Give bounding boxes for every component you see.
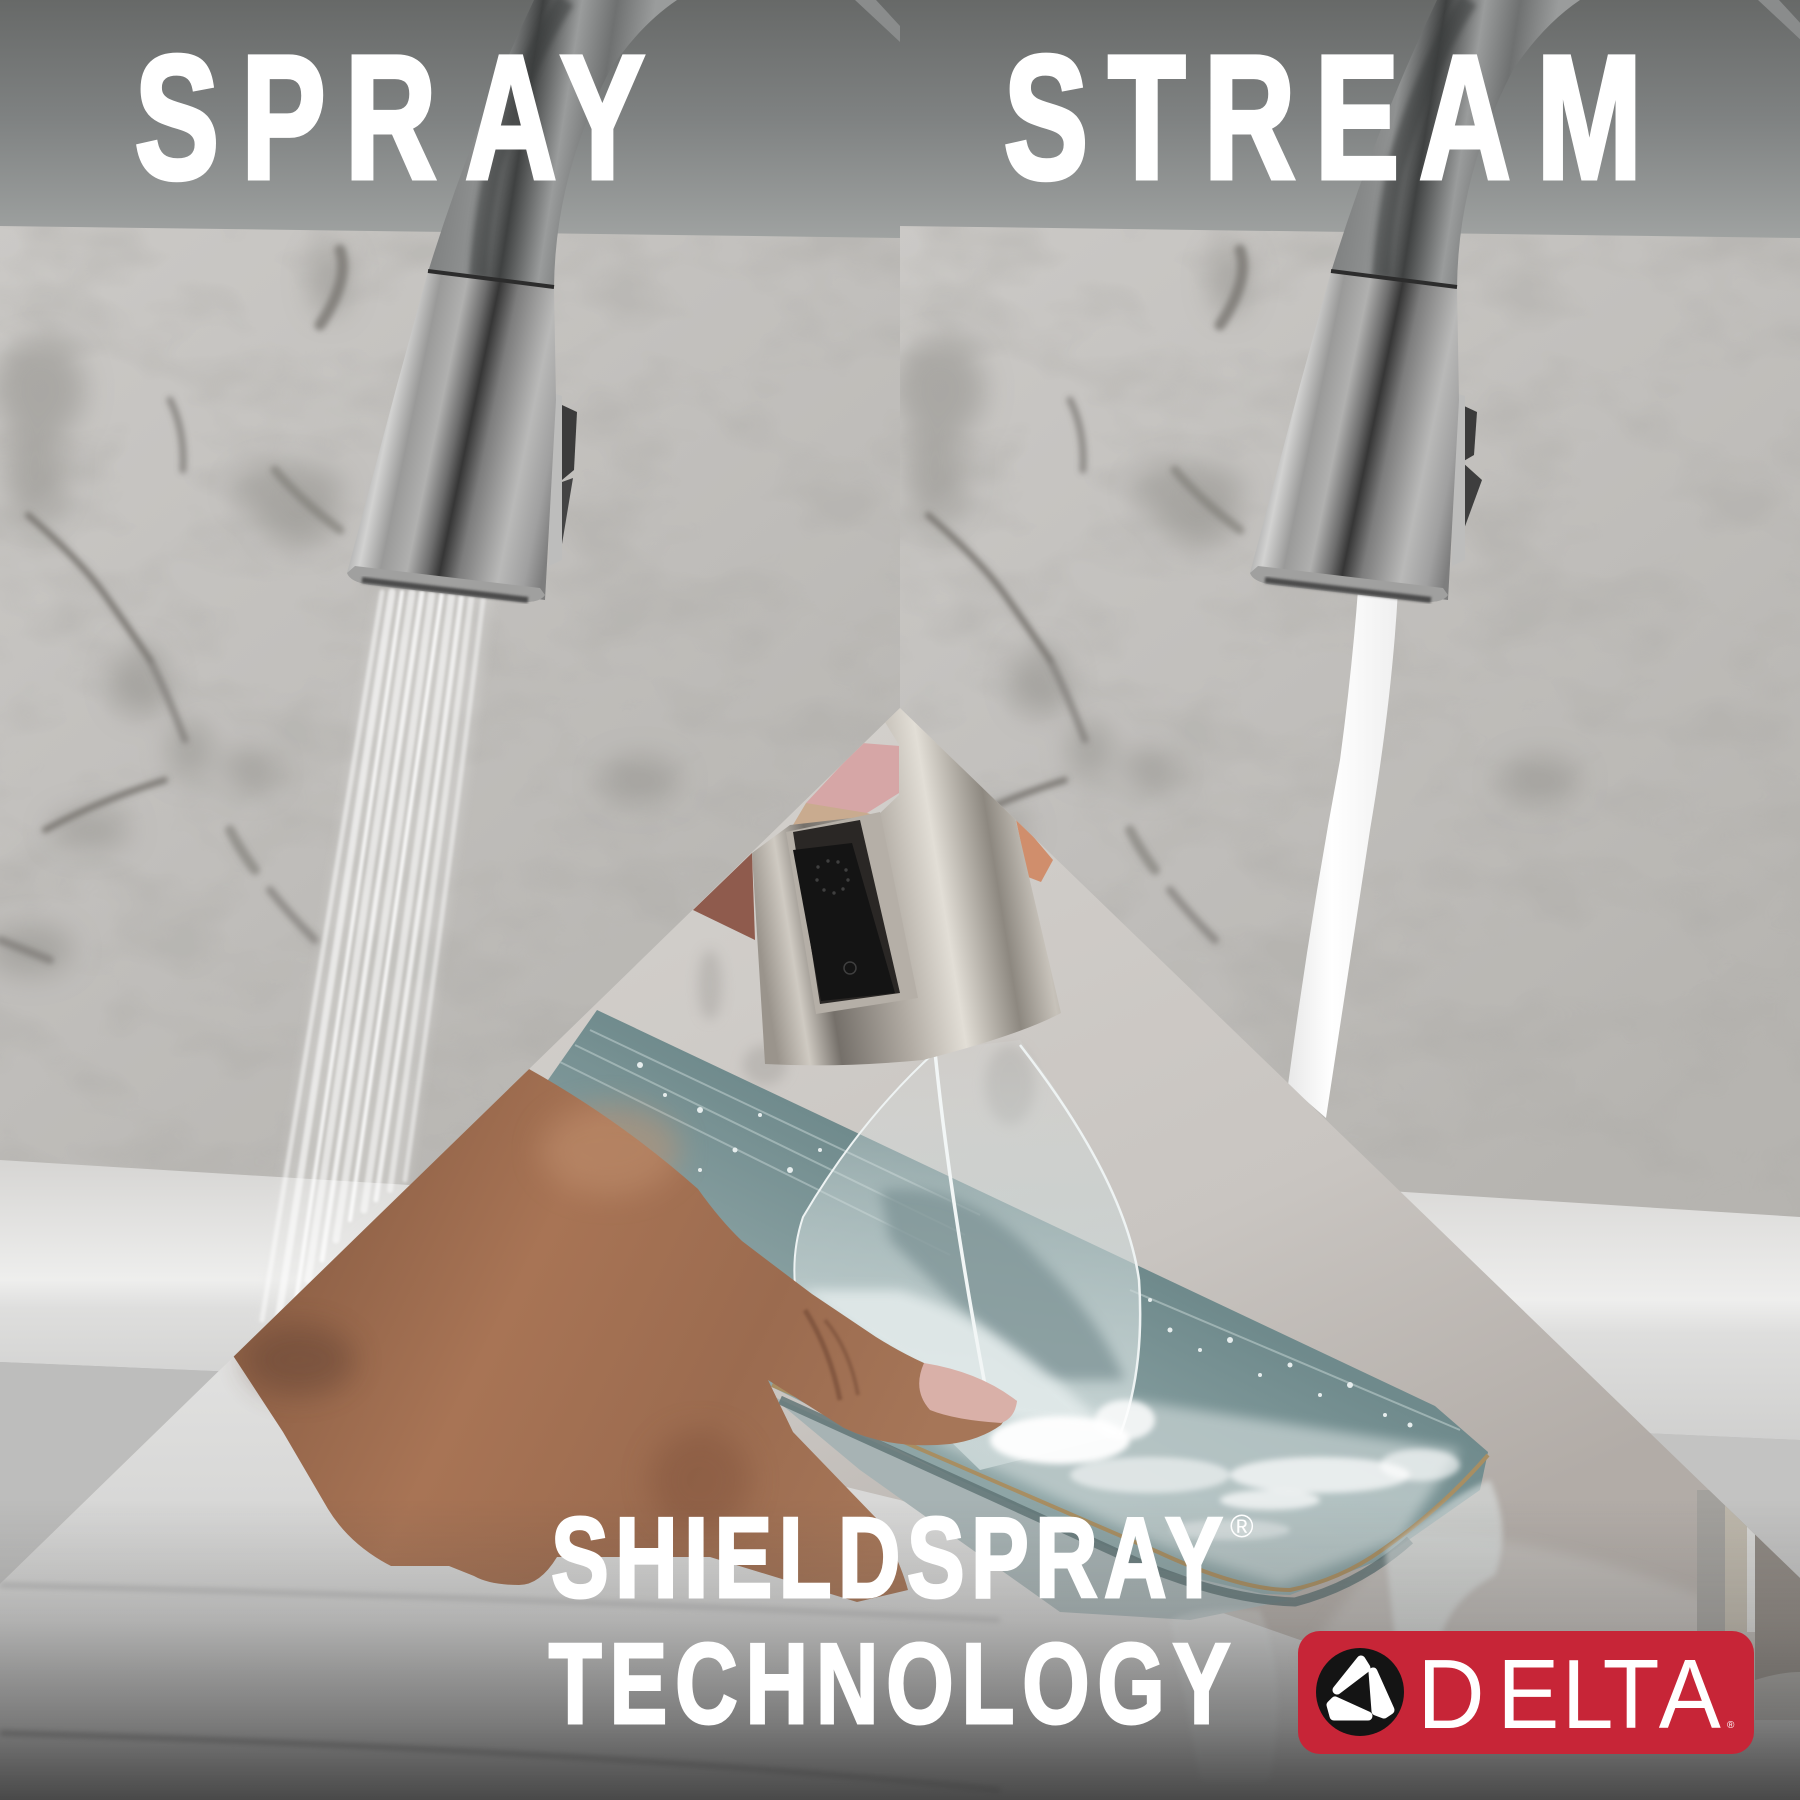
light wet area of plate bbox=[930, 1400, 1460, 1585]
marble wall bbox=[0, 220, 900, 1220]
counter top right bbox=[1400, 1192, 1800, 1440]
counter top left bbox=[0, 1160, 410, 1371]
icon: spray faucet head bbox=[347, 0, 900, 602]
registered mark: ® bbox=[1230, 1508, 1254, 1544]
panel: shieldspray triangle bbox=[0, 700, 1800, 1800]
water runoff bbox=[1170, 1480, 1502, 1780]
hand bbox=[232, 1069, 1017, 1602]
faucet base in background bbox=[1697, 1490, 1800, 1720]
panel: spray bbox=[0, 0, 900, 1371]
fingernail bbox=[919, 1363, 1017, 1423]
plate bbox=[520, 1010, 1488, 1620]
pinching fingers bbox=[693, 743, 1053, 940]
sink basin bbox=[0, 1340, 1800, 1800]
panel: stream bbox=[886, 0, 1800, 1800]
heading: shieldspray technology: SHIELDSPRAY bbox=[551, 1495, 1223, 1622]
logo: delta wordmark: DELTA bbox=[1417, 1640, 1721, 1750]
triangle marble background bbox=[278, 708, 1709, 1640]
heading: shieldspray technology: TECHNOLOGY bbox=[549, 1621, 1230, 1748]
plate speckles bbox=[637, 1062, 1412, 1428]
top gray band right bbox=[900, 0, 1800, 238]
water spray bbox=[258, 590, 494, 1330]
water bell bbox=[794, 1040, 1140, 1470]
icon: stream faucet head bbox=[1250, 0, 1800, 602]
heading: shieldspray technology bbox=[549, 1495, 1254, 1748]
water stream bbox=[1288, 590, 1398, 1118]
sink below counter left bbox=[432, 273, 524, 578]
button bbox=[793, 843, 895, 1001]
pull-down spray head bbox=[752, 708, 1061, 1065]
logo: delta emblem bbox=[1316, 1648, 1404, 1736]
top gray band left bbox=[0, 0, 900, 238]
marble wall bbox=[886, 220, 1800, 1220]
water foam bbox=[990, 1400, 1460, 1540]
triangle marble veins bbox=[698, 950, 1035, 1125]
heading: stream: STREAM bbox=[1004, 20, 1642, 216]
sink below counter right bbox=[900, 1400, 1800, 1800]
heading: spray: SPRAY bbox=[135, 20, 645, 216]
logo: delta badge bbox=[1298, 1631, 1754, 1754]
logo: delta badge: ® bbox=[1727, 1720, 1735, 1731]
bottom dark gradient bbox=[0, 1500, 1800, 1800]
